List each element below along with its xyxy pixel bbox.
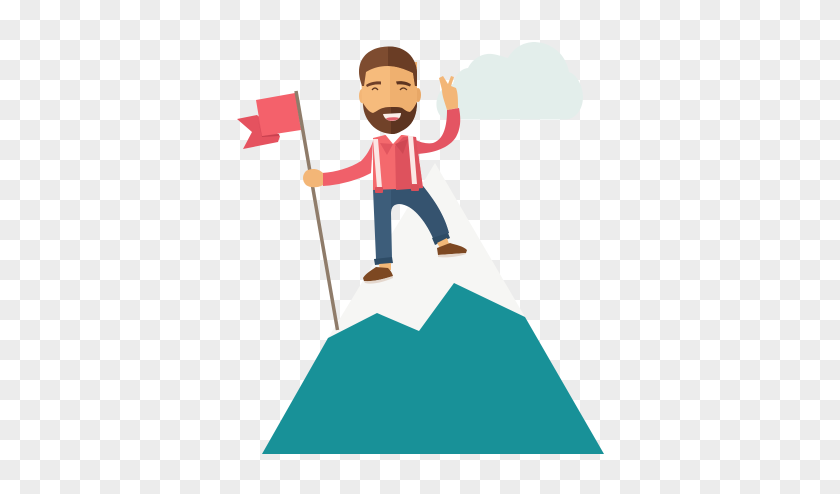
eyes	[372, 88, 378, 90]
suspender right	[408, 136, 417, 184]
collar	[384, 133, 403, 144]
left arm	[322, 141, 373, 186]
flag fold	[257, 116, 279, 137]
icon: cloud	[436, 42, 583, 120]
flag tail	[237, 115, 280, 149]
teal mountain body	[262, 283, 604, 454]
clips	[375, 187, 383, 193]
snow cap	[328, 163, 525, 338]
eyebrows	[366, 81, 381, 87]
man	[303, 46, 467, 284]
beard	[363, 102, 417, 134]
cuffs	[374, 257, 393, 265]
right arm	[414, 108, 460, 154]
shirt	[373, 133, 423, 193]
ears	[359, 89, 365, 103]
icon: flag with pole	[237, 91, 338, 330]
mountain	[262, 163, 604, 454]
trousers	[373, 186, 450, 265]
right lapel	[395, 139, 408, 154]
left lapel	[380, 143, 393, 155]
face	[361, 62, 390, 130]
flag main	[256, 93, 301, 136]
flag pole	[296, 91, 338, 330]
left hand	[303, 169, 323, 187]
hair	[359, 46, 417, 86]
shoes	[363, 238, 467, 284]
right hand	[439, 76, 458, 110]
mouth	[383, 113, 401, 121]
suspender left	[373, 139, 382, 188]
head	[359, 46, 421, 134]
